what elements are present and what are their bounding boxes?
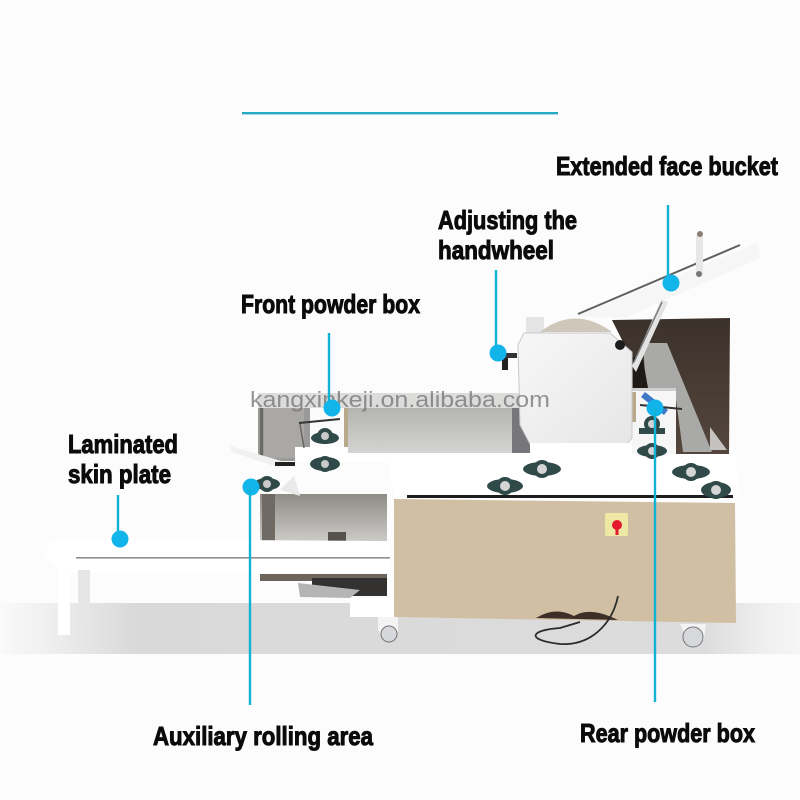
callout: laminated skin plate: skin plate — [68, 459, 171, 489]
callout: adjusting the handwheel — [438, 205, 577, 362]
callout: rear powder box: Rear powder box — [580, 718, 755, 748]
top rule — [242, 112, 558, 114]
bearings — [254, 416, 731, 499]
callout: auxiliary rolling area: Auxiliary rolling area — [153, 721, 373, 751]
floor shadow — [0, 603, 800, 654]
extended chute — [577, 231, 760, 372]
beige control cabinet — [394, 495, 736, 644]
callout: auxiliary rolling area — [153, 478, 373, 751]
rolling table — [44, 539, 390, 635]
callout: extended face bucket — [556, 151, 778, 292]
callout: laminated skin plate — [68, 429, 178, 548]
callout: laminated skin plate: Laminated — [68, 429, 178, 459]
small linkage arms — [230, 392, 682, 496]
callout: rear powder box — [580, 400, 755, 748]
under-table mechanism — [260, 574, 396, 617]
roller head housing — [502, 317, 632, 444]
callout: front powder box: Front powder box — [241, 289, 420, 319]
upper frame with open compartment — [258, 393, 530, 461]
caster wheels — [378, 617, 706, 647]
callout: adjusting the handwheel: Adjusting the — [438, 205, 577, 235]
lower compartment — [260, 494, 387, 541]
callout: front powder box — [241, 289, 420, 416]
hopper — [612, 318, 730, 454]
callout: adjusting the handwheel: handwheel — [438, 235, 554, 265]
machine illustration — [44, 231, 760, 647]
watermark: kangxinkeji.on.alibaba.com — [250, 387, 550, 412]
white main body — [280, 443, 740, 497]
